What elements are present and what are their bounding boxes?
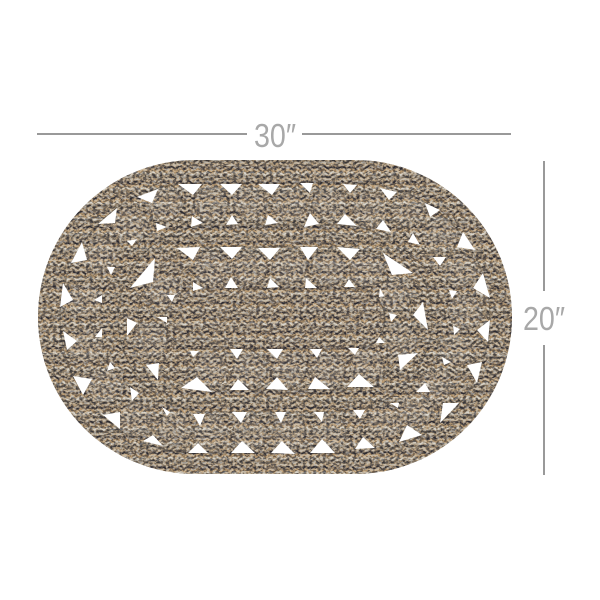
braid ring seams (60, 183, 490, 453)
height dimension line (543, 161, 545, 475)
width label: 30″ (254, 117, 296, 154)
coiled braid circles (68, 187, 482, 449)
rug openings (60, 183, 490, 454)
width dimension line (37, 133, 511, 135)
braided oval rug (38, 160, 512, 474)
height label: 20″ (523, 300, 565, 337)
